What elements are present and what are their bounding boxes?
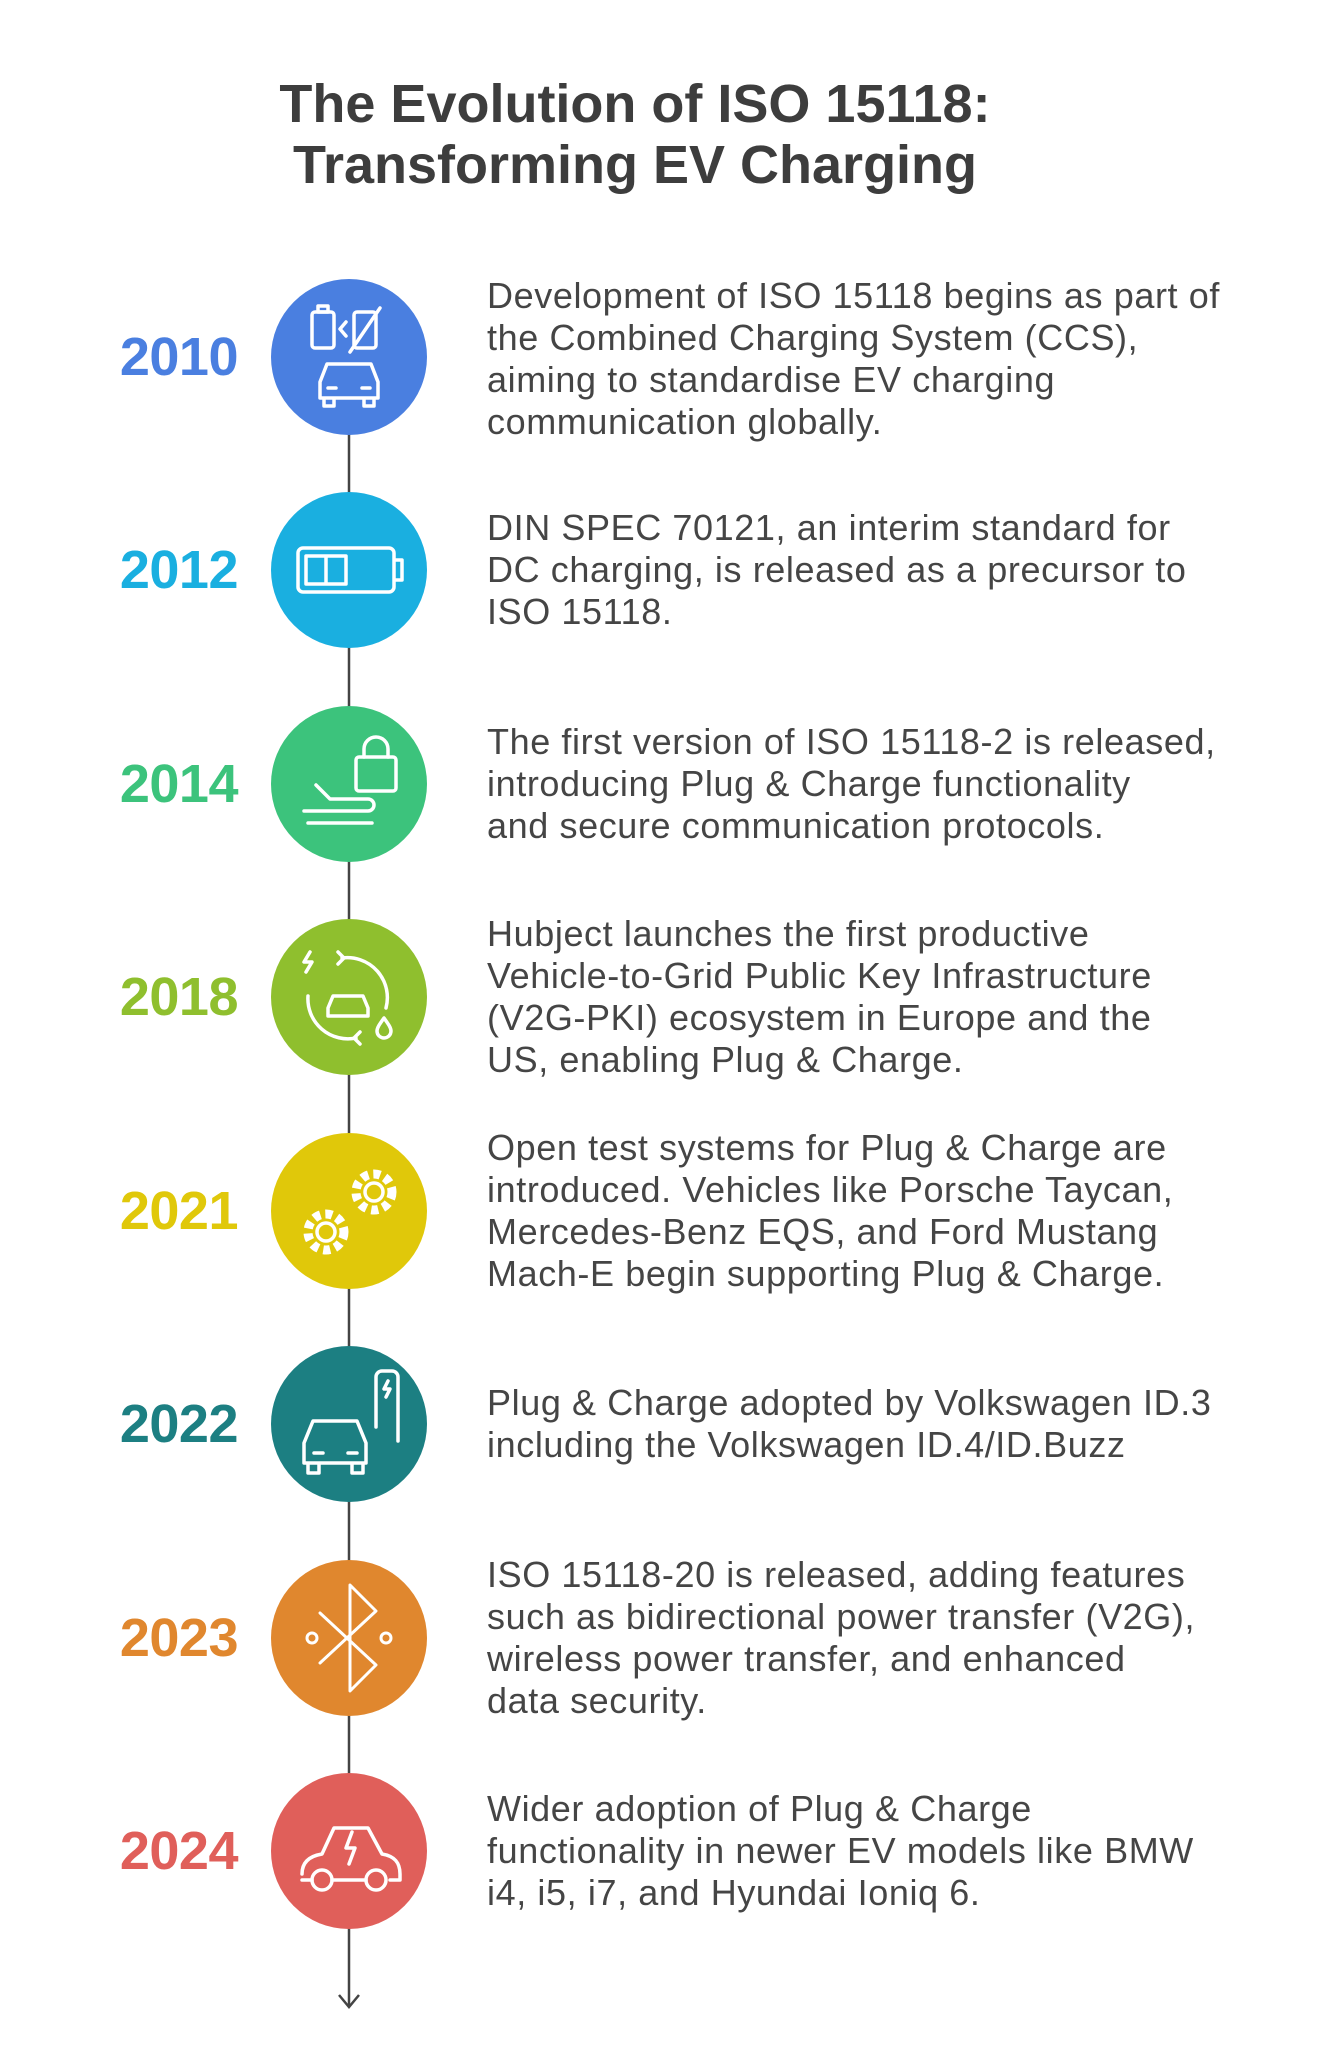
icon: car charging xyxy=(271,1346,427,1502)
text 2012 xyxy=(487,507,1187,632)
text 2018: US, enabling Plug & Charge. xyxy=(487,1039,963,1080)
text 2018: Hubject launches the first productive xyxy=(487,913,1090,954)
text 2014 xyxy=(487,721,1216,846)
text 2024 xyxy=(487,1788,1194,1913)
text 2021: Mach-E begin supporting Plug & Charge. xyxy=(487,1253,1164,1294)
title: Transforming EV Charging xyxy=(293,135,977,195)
text 2010: the Combined Charging System (CCS), xyxy=(487,317,1138,358)
text 2021 xyxy=(487,1127,1173,1294)
text 2014: and secure communication protocols. xyxy=(487,805,1104,846)
text 2022: Plug & Charge adopted by Volkswagen ID.3 xyxy=(487,1382,1211,1423)
icon: lock and plug xyxy=(271,706,427,862)
text 2010: communication globally. xyxy=(487,401,882,442)
text 2012: DIN SPEC 70121, an interim standard for xyxy=(487,507,1171,548)
text 2021: Mercedes-Benz EQS, and Ford Mustang xyxy=(487,1211,1158,1252)
year 2010: 2010 xyxy=(120,327,238,387)
text 2021: introduced. Vehicles like Porsche Taycan, xyxy=(487,1169,1173,1210)
text 2024: i4, i5, i7, and Hyundai Ioniq 6. xyxy=(487,1872,981,1913)
year 2018: 2018 xyxy=(120,967,238,1027)
text 2023: ISO 15118-20 is released, adding features xyxy=(487,1554,1185,1595)
text 2021: Open test systems for Plug & Charge are xyxy=(487,1127,1167,1168)
year 2012: 2012 xyxy=(120,540,238,600)
text 2022 xyxy=(487,1382,1211,1465)
text 2012: ISO 15118. xyxy=(487,591,672,632)
icon: battery and car xyxy=(271,279,427,435)
year 2014: 2014 xyxy=(120,754,238,814)
text 2023 xyxy=(487,1554,1195,1721)
icon: bluetooth xyxy=(271,1560,427,1716)
text 2023: wireless power transfer, and enhanced xyxy=(487,1638,1126,1679)
text 2023: data security. xyxy=(487,1680,707,1721)
text 2018: (V2G-PKI) ecosystem in Europe and the xyxy=(487,997,1152,1038)
text 2010: aiming to standardise EV charging xyxy=(487,359,1055,400)
year 2022: 2022 xyxy=(120,1394,238,1454)
text 2014: The first version of ISO 15118-2 is released, xyxy=(487,721,1216,762)
year 2021: 2021 xyxy=(120,1181,238,1241)
text 2018: Vehicle-to-Grid Public Key Infrastructure xyxy=(487,955,1152,996)
icon: gears xyxy=(271,1133,427,1289)
icon: battery xyxy=(271,492,427,648)
icon: electric car xyxy=(271,1773,427,1929)
title xyxy=(279,74,991,195)
text 2014: introducing Plug & Charge functionality xyxy=(487,763,1131,804)
icon: V2G cycle xyxy=(271,919,427,1075)
text 2012: DC charging, is released as a precursor to xyxy=(487,549,1187,590)
text 2023: such as bidirectional power transfer (V2G), xyxy=(487,1596,1195,1637)
year 2024: 2024 xyxy=(120,1821,238,1881)
text 2010: Development of ISO 15118 begins as part of xyxy=(487,275,1220,316)
text 2010 xyxy=(487,275,1220,442)
text 2022: including the Volkswagen ID.4/ID.Buzz xyxy=(487,1424,1126,1465)
text 2018 xyxy=(487,913,1152,1080)
year 2023: 2023 xyxy=(120,1608,238,1668)
title: The Evolution of ISO 15118: xyxy=(279,74,991,134)
text 2024: Wider adoption of Plug & Charge xyxy=(487,1788,1032,1829)
text 2024: functionality in newer EV models like BMW xyxy=(487,1830,1194,1871)
